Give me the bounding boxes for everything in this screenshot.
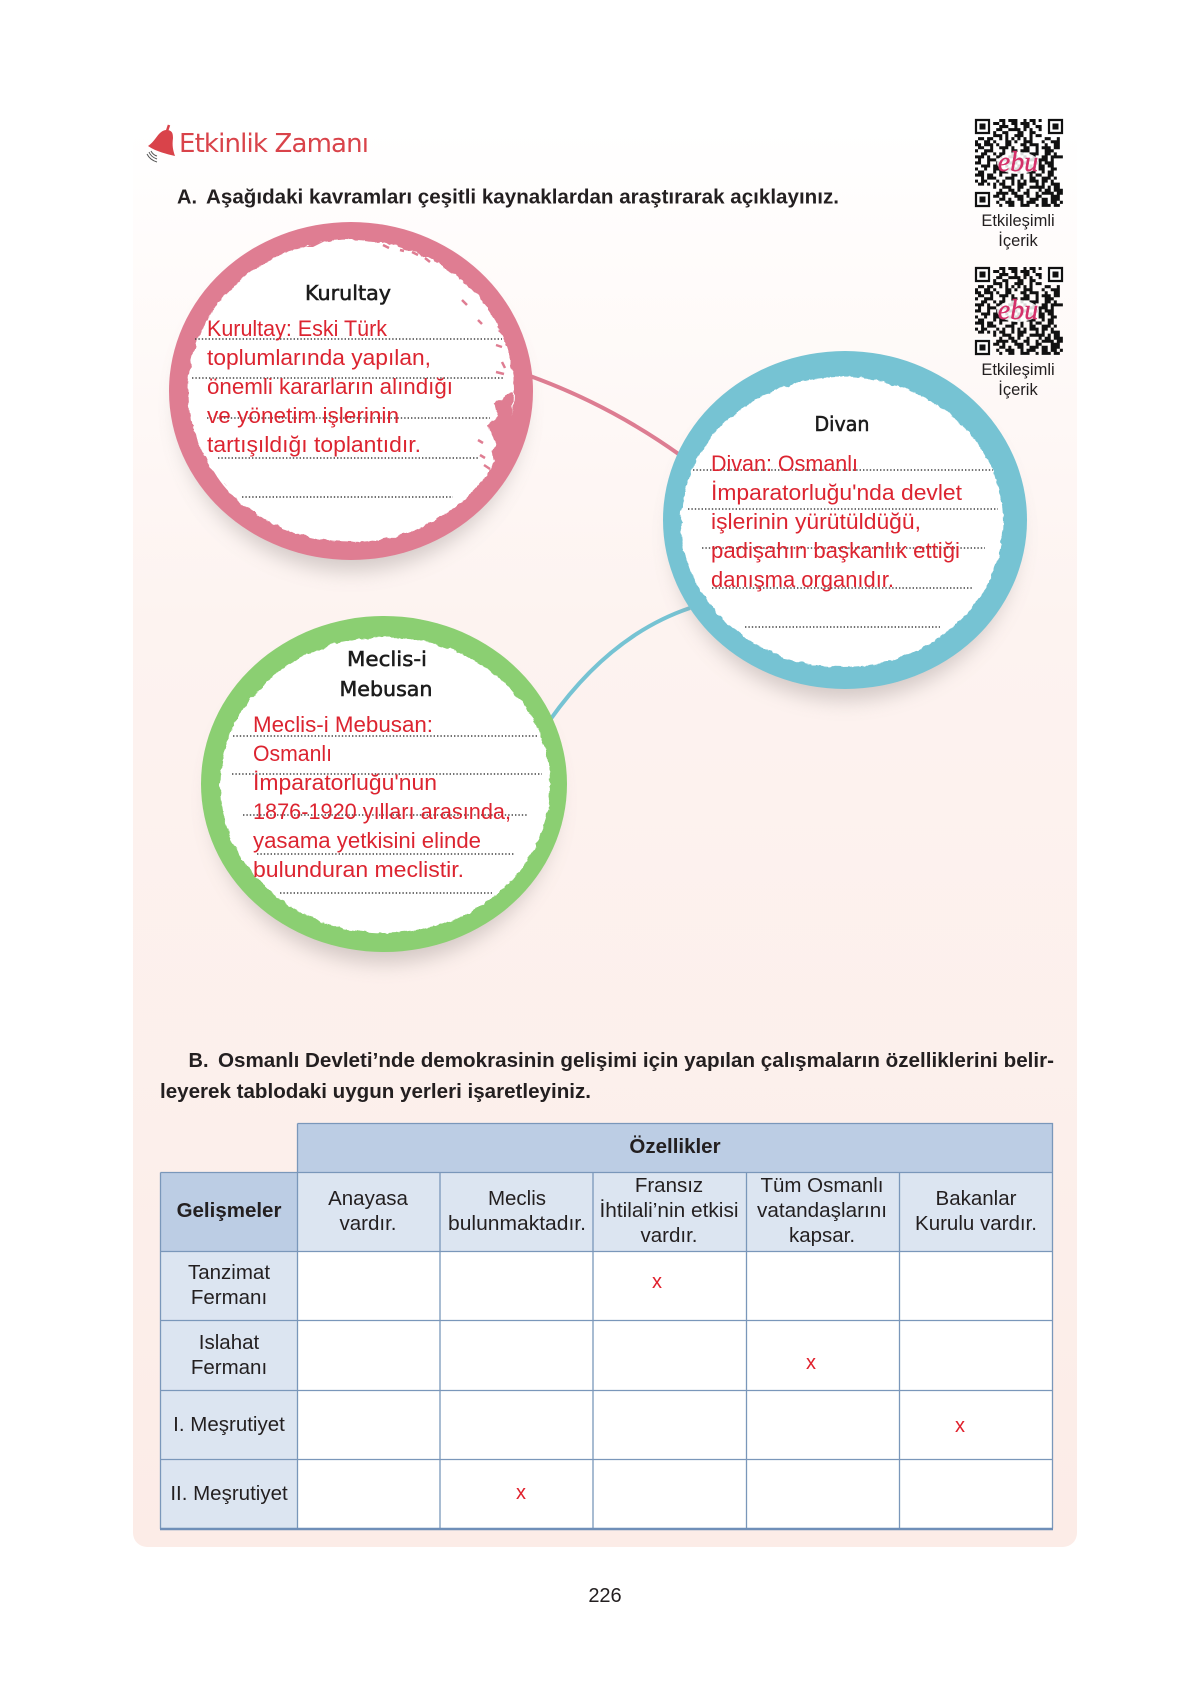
row header title: Gelişmeler <box>177 1199 281 1222</box>
answer text: Divan: danışma organıdır. <box>711 567 894 592</box>
answer text: Meclis-i Mebusan: İmparatorluğu'nun <box>253 770 437 795</box>
column headers: bulunmaktadır. <box>448 1212 586 1235</box>
caption: QR 2: İçerik <box>998 380 1038 399</box>
column headers: Kurulu vardır. <box>915 1212 1037 1235</box>
caption: QR 2: Etkileşimli <box>981 361 1055 379</box>
heading: section B: B. <box>188 1049 208 1072</box>
table header: Özellikler <box>629 1135 721 1158</box>
heading: Divan: Divan <box>814 412 870 436</box>
column headers: İhtilali’nin etkisi <box>600 1199 738 1222</box>
column headers: vardır. <box>641 1224 697 1247</box>
marks: x <box>652 1271 662 1293</box>
dotted answer lines <box>688 470 998 627</box>
arrow: connector pink to blue <box>530 376 680 455</box>
heading: section B: leyerek tablodaki uygun yerleri işaretleyiniz. <box>160 1080 591 1103</box>
answer text: Kurultay: ve yönetim işlerinin <box>207 403 399 428</box>
answer text: Meclis-i Mebusan: Meclis-i Mebusan: <box>253 712 433 737</box>
answer text: Kurultay: tartışıldığı toplantıdır. <box>207 432 421 457</box>
marks: x <box>955 1415 965 1437</box>
column headers: Tüm Osmanlı <box>760 1174 884 1197</box>
marks: x <box>806 1352 816 1374</box>
answer text: Divan <box>711 451 962 592</box>
answer text: Divan: işlerinin yürütüldüğü, <box>711 509 921 534</box>
column headers: kapsar. <box>789 1224 855 1247</box>
heading: section A: Aşağıdaki kavramları çeşitli kaynaklardan araştırarak açıklayınız. <box>206 186 839 208</box>
heading: Meclis-i Mebusan: Mebusan <box>340 677 432 701</box>
row headers: I. Meşrutiyet <box>173 1413 285 1436</box>
caption: QR 2 <box>981 361 1055 399</box>
marks: x <box>516 1482 526 1504</box>
answer text: Meclis-i Mebusan: bulunduran meclistir. <box>253 857 464 882</box>
row headers: Islahat <box>199 1331 260 1354</box>
answer text: Kurultay: Kurultay: Eski Türk <box>207 316 388 341</box>
column headers: Bakanlar <box>936 1187 1017 1210</box>
icon: QR code 1: ebu <box>998 147 1038 178</box>
answer text: Meclis-i Mebusan: yasama yetkisini elinde <box>253 828 481 853</box>
column headers: vatandaşlarını <box>757 1199 887 1222</box>
row headers: Tanzimat <box>188 1261 270 1284</box>
panel: Kurultay circle <box>169 222 533 571</box>
page number: 226 <box>588 1585 622 1607</box>
panel: Divan circle <box>663 351 1027 700</box>
arrow: connector blue to green <box>550 608 690 720</box>
heading: Meclis-i Mebusan: Meclis-i <box>347 647 427 671</box>
row headers: II. Meşrutiyet <box>170 1482 288 1505</box>
row headers <box>170 1261 288 1505</box>
heading: Meclis-i Mebusan <box>340 647 432 701</box>
column headers: Anayasa <box>328 1187 408 1210</box>
title: Etkinlik Zamanı <box>179 129 369 159</box>
row headers: Fermanı <box>191 1356 267 1379</box>
panel: Meclis-i Mebusan circle <box>201 616 567 963</box>
answer text: Divan: Divan: Osmanlı <box>711 451 858 476</box>
panel: activity background <box>133 130 1077 1547</box>
dotted answer lines <box>232 736 542 893</box>
answer text: Divan: İmparatorluğu'nda devlet <box>711 480 962 505</box>
column headers <box>328 1174 1037 1247</box>
heading: section A: A. <box>177 186 197 208</box>
caption: QR 1 <box>981 212 1055 250</box>
answer text: Kurultay: önemli kararların alındığı <box>207 374 453 399</box>
column headers: Meclis <box>488 1187 546 1210</box>
table: developments and features <box>160 1123 1053 1529</box>
heading: section B: Osmanlı Devleti’nde demokrasinin gelişimi için yapılan çalışmaların özelliklerini belir- <box>218 1049 1054 1072</box>
icon: QR code 2 <box>975 267 1063 355</box>
heading: Kurultay: Kurultay <box>305 281 391 305</box>
answer text: Meclis-i Mebusan <box>253 712 511 882</box>
caption: QR 1: İçerik <box>998 231 1038 250</box>
icon: QR code 2: ebu <box>998 295 1038 326</box>
column headers: Fransız <box>635 1174 703 1197</box>
marks <box>516 1271 965 1504</box>
caption: QR 1: Etkileşimli <box>981 212 1055 230</box>
answer text: Kurultay <box>207 316 453 457</box>
icon: bell <box>147 125 175 162</box>
answer text: Divan: padişahın başkanlık ettiği <box>711 538 960 563</box>
answer text: Meclis-i Mebusan: 1876-1920 yılları arasında, <box>253 799 511 824</box>
heading: section B <box>160 1049 1054 1103</box>
answer text: Meclis-i Mebusan: Osmanlı <box>253 741 332 766</box>
dotted answer lines <box>192 339 503 497</box>
column headers: vardır. <box>340 1212 396 1235</box>
row headers: Fermanı <box>191 1286 267 1309</box>
answer text: Kurultay: toplumlarında yapılan, <box>207 345 431 370</box>
icon: QR code 1 <box>975 119 1063 207</box>
